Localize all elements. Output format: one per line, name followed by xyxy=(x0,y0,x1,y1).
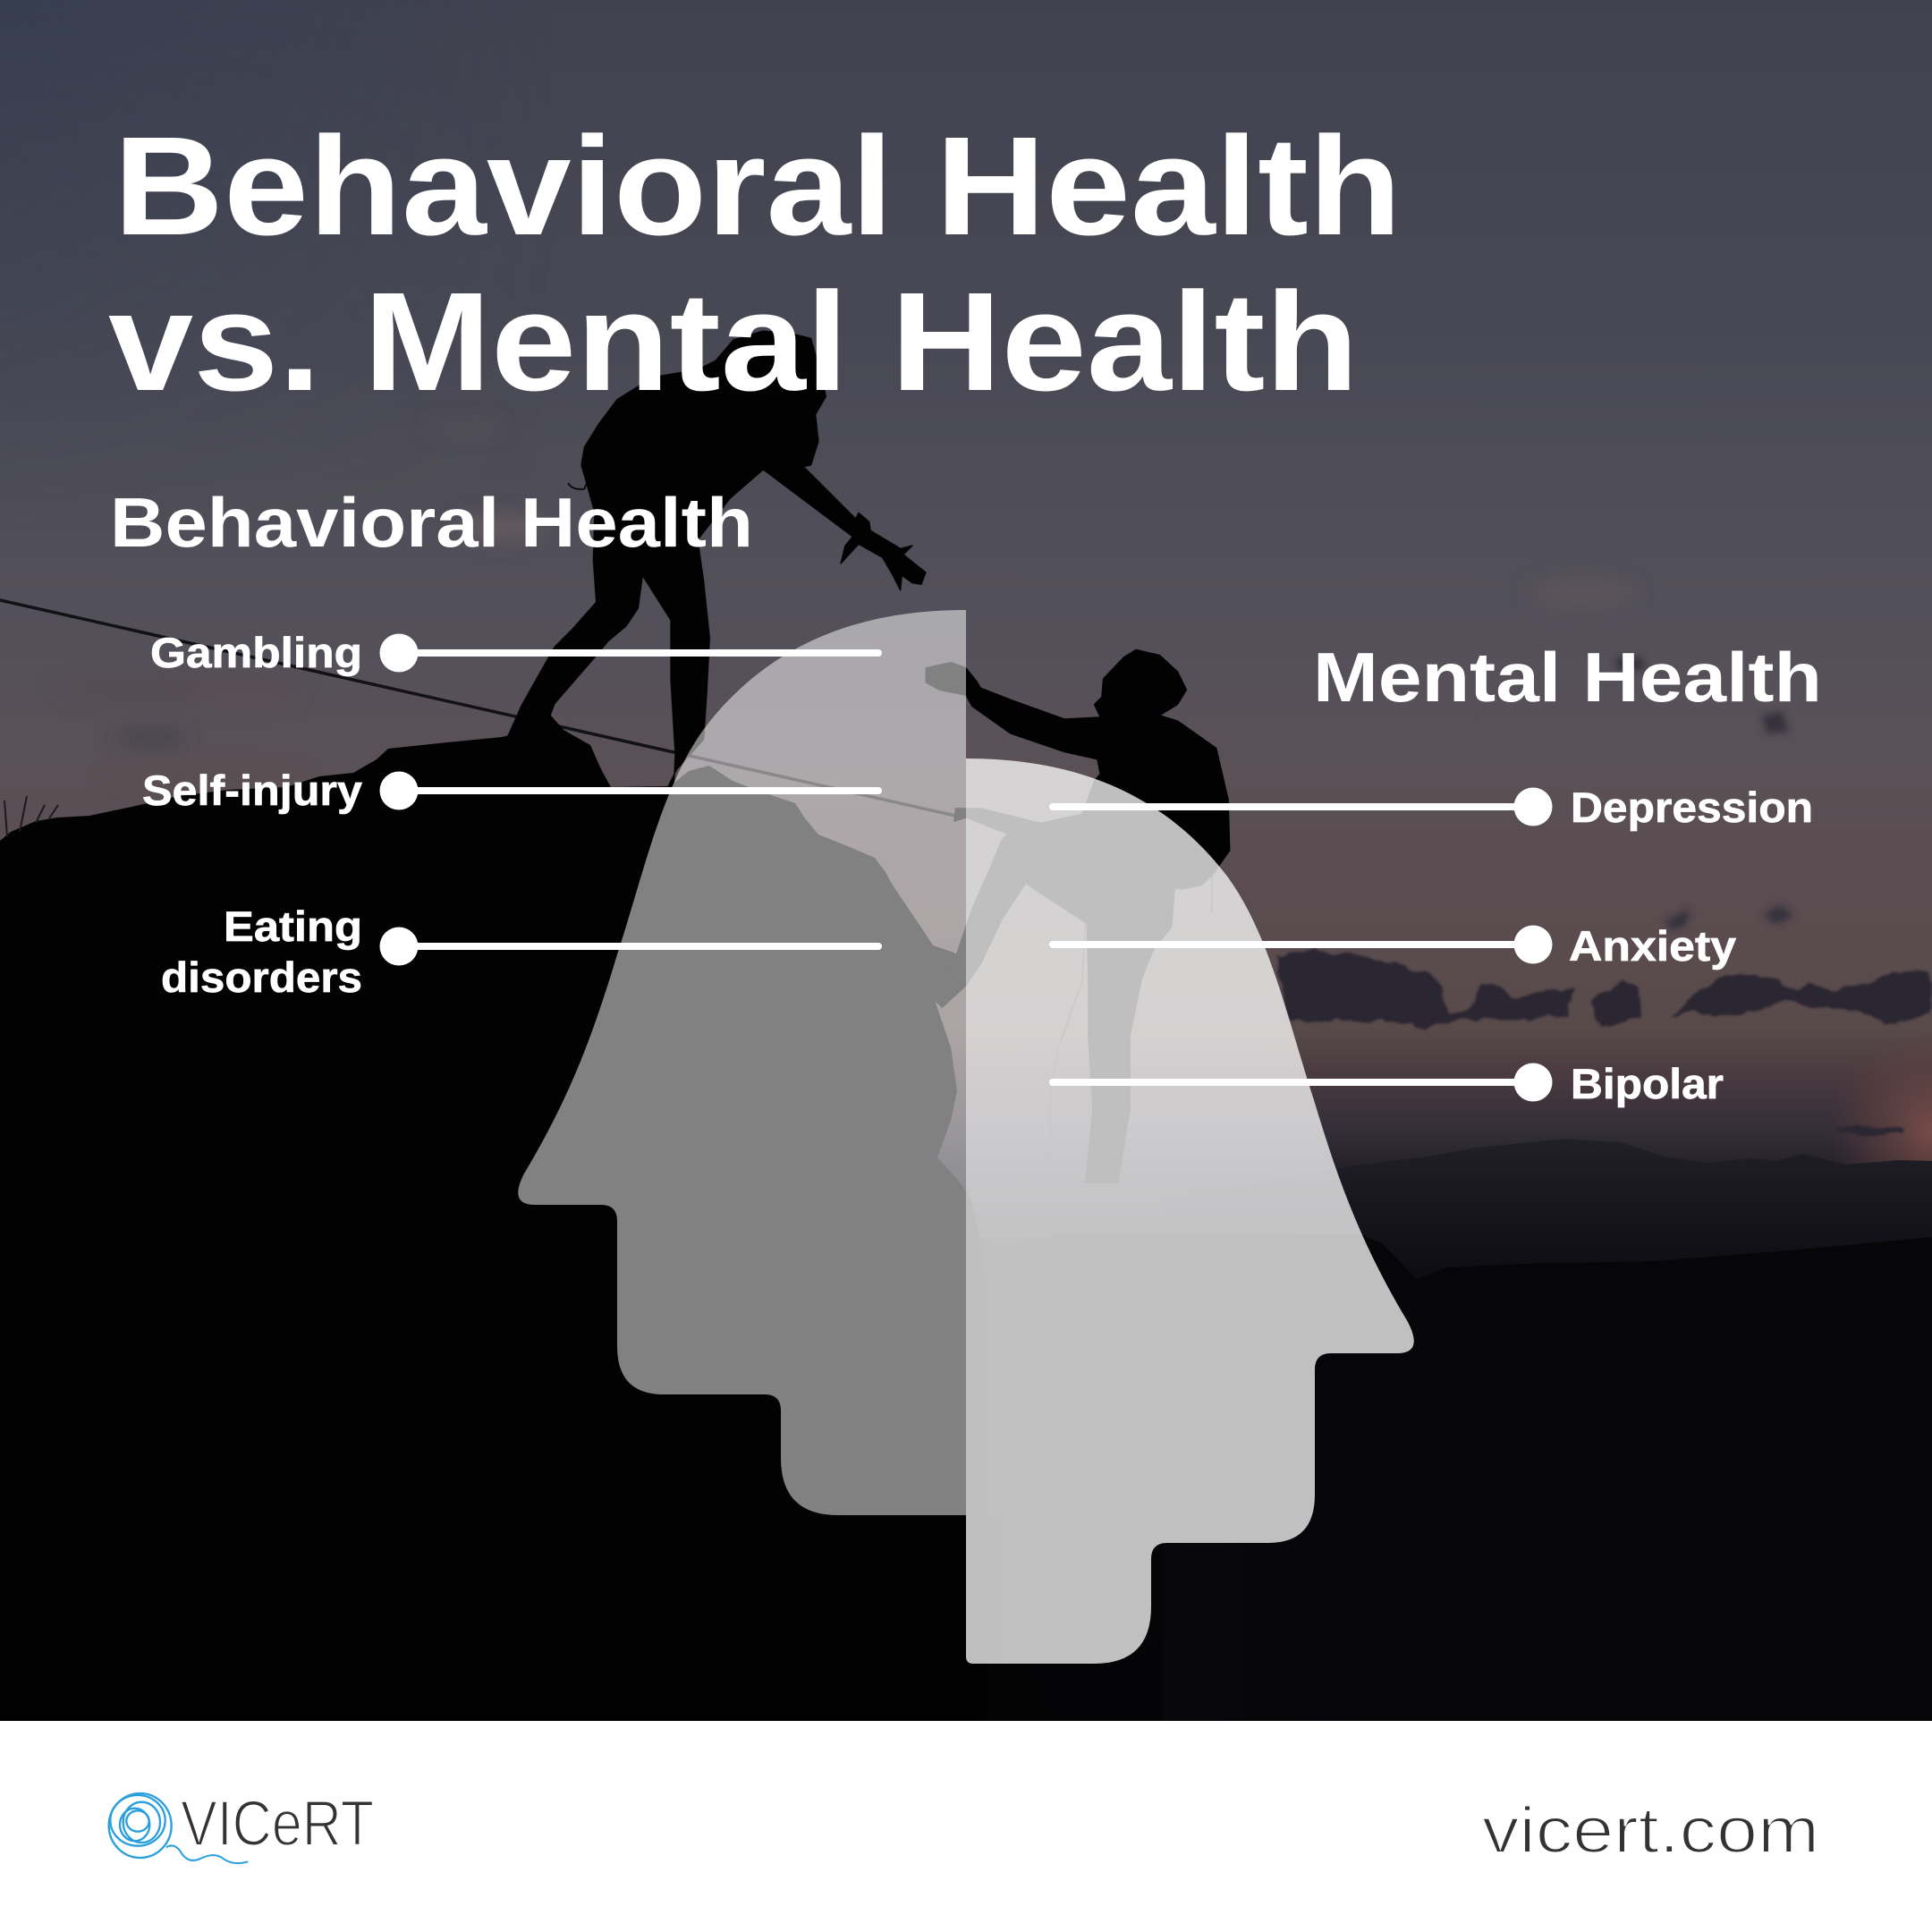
silhouette: upper hiker xyxy=(507,331,926,787)
behavioral item: self-injury: Self-injury xyxy=(142,767,362,814)
grass xyxy=(4,796,58,836)
icon: blue spiral xyxy=(109,1793,248,1863)
website url: vicert.com xyxy=(1482,1795,1819,1867)
title: vs. Mental Health xyxy=(108,264,1359,420)
title: Behavioral Health xyxy=(114,108,1402,265)
behavioral item: eating disorders: disorders xyxy=(161,953,362,1001)
heading: mental health: Mental Health xyxy=(1313,638,1822,716)
heading: behavioral health: Behavioral Health xyxy=(110,483,753,562)
behavioral item: self-injury xyxy=(142,767,882,814)
behavioral item: eating disorders xyxy=(161,902,882,1001)
behavioral item: eating disorders: Eating xyxy=(224,902,362,950)
title xyxy=(108,108,1402,420)
rock xyxy=(0,724,984,1721)
mental item: anxiety: Anxiety xyxy=(1569,922,1736,970)
behavioral item: gambling: Gambling xyxy=(150,629,362,676)
mental item: bipolar: Bipolar xyxy=(1571,1060,1724,1107)
silhouette: lower hiker xyxy=(926,649,1230,1182)
mental item: depression xyxy=(1049,784,1813,831)
distant mountains xyxy=(1163,1139,1932,1721)
logo: vicert xyxy=(109,1789,374,1863)
behavioral item: gambling xyxy=(150,629,882,676)
mental item: bipolar xyxy=(1049,1060,1724,1107)
wordmark: VICeRT xyxy=(181,1789,374,1860)
distant clouds xyxy=(1274,951,1932,1136)
mental item: anxiety xyxy=(1049,922,1736,970)
footer band xyxy=(0,1721,1932,1932)
right head: mental health xyxy=(966,758,1414,1664)
rope xyxy=(0,600,955,816)
left head: behavioral health xyxy=(518,610,966,1515)
mental item: depression: Depression xyxy=(1571,784,1813,831)
